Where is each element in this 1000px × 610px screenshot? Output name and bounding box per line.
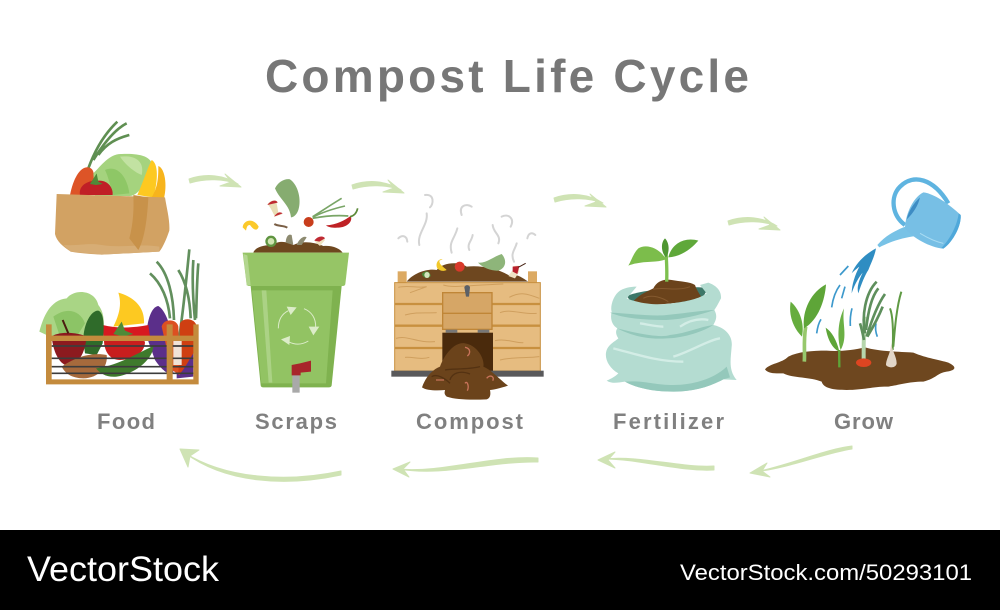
base [391, 371, 544, 377]
worm [274, 224, 287, 228]
recycling arrows [278, 307, 319, 345]
sack [606, 283, 737, 392]
footer url: VectorStock.com/50293101 [680, 560, 972, 585]
posts [398, 271, 407, 283]
plant 4: garlic [890, 292, 901, 350]
can body [905, 192, 961, 249]
plant 2 [836, 350, 843, 367]
compost pile [422, 343, 508, 400]
label: Compost: Compost [416, 409, 524, 434]
banana peel [243, 221, 259, 231]
icon: wooden compost box [391, 195, 544, 400]
soil [633, 280, 702, 305]
compost soil on top [407, 263, 528, 282]
door [443, 293, 492, 329]
banana [113, 293, 144, 327]
carrots [162, 320, 180, 375]
icon: fertilizer sack with sprout [606, 238, 737, 392]
arrow: food to scraps [189, 174, 241, 187]
arrow: scraps back to food [180, 449, 341, 481]
footer bar [0, 530, 1000, 610]
arrow: compost back to scraps [393, 458, 538, 477]
steam [398, 195, 535, 262]
arrow: grow back to fertilizer [750, 446, 852, 477]
plant 1 [804, 327, 806, 362]
eggplant [147, 306, 173, 374]
box [395, 283, 540, 371]
icon: crate of vegetables [39, 249, 199, 384]
cabbage [39, 292, 104, 337]
icon: watering can and plants [765, 179, 961, 390]
sprout [661, 248, 672, 282]
handle [894, 179, 948, 225]
chili [326, 216, 351, 228]
plant 3: leek [864, 317, 865, 360]
icon: green compost bin with falling scraps [243, 179, 358, 393]
frame [46, 324, 199, 384]
bin body [251, 286, 342, 387]
cucumber [83, 311, 104, 355]
footer brand: VectorStock [27, 550, 220, 589]
arrow: scraps to compost [352, 180, 404, 193]
soil [253, 242, 343, 253]
water [852, 248, 876, 293]
onion scrap [313, 198, 348, 218]
wood grain [396, 284, 539, 360]
arrow: compost to fertilizer [554, 194, 606, 207]
arrow: fertilizer back to compost [598, 452, 714, 470]
label: Food: Food [97, 409, 155, 434]
green cucumber [96, 346, 153, 377]
spout [877, 225, 917, 247]
label: Fertilizer: Fertilizer [613, 409, 724, 434]
lettuce scrap [275, 179, 300, 217]
soil [765, 347, 954, 390]
scallions [150, 249, 198, 337]
label: Scraps: Scraps [255, 409, 337, 434]
bin rim [243, 253, 349, 286]
title: Compost Life Cycle [265, 50, 749, 102]
wire lines [52, 346, 193, 373]
potato [62, 354, 107, 378]
label: Grow: Grow [834, 409, 894, 434]
icon: grocery bag of food [55, 122, 169, 255]
tap [292, 373, 300, 393]
apple core [268, 200, 282, 217]
hatch opening [442, 333, 493, 371]
arrow: fertilizer to grow [728, 217, 780, 230]
apple [52, 333, 87, 366]
scraps on soil [265, 236, 277, 247]
peppers and tomato [103, 325, 150, 337]
